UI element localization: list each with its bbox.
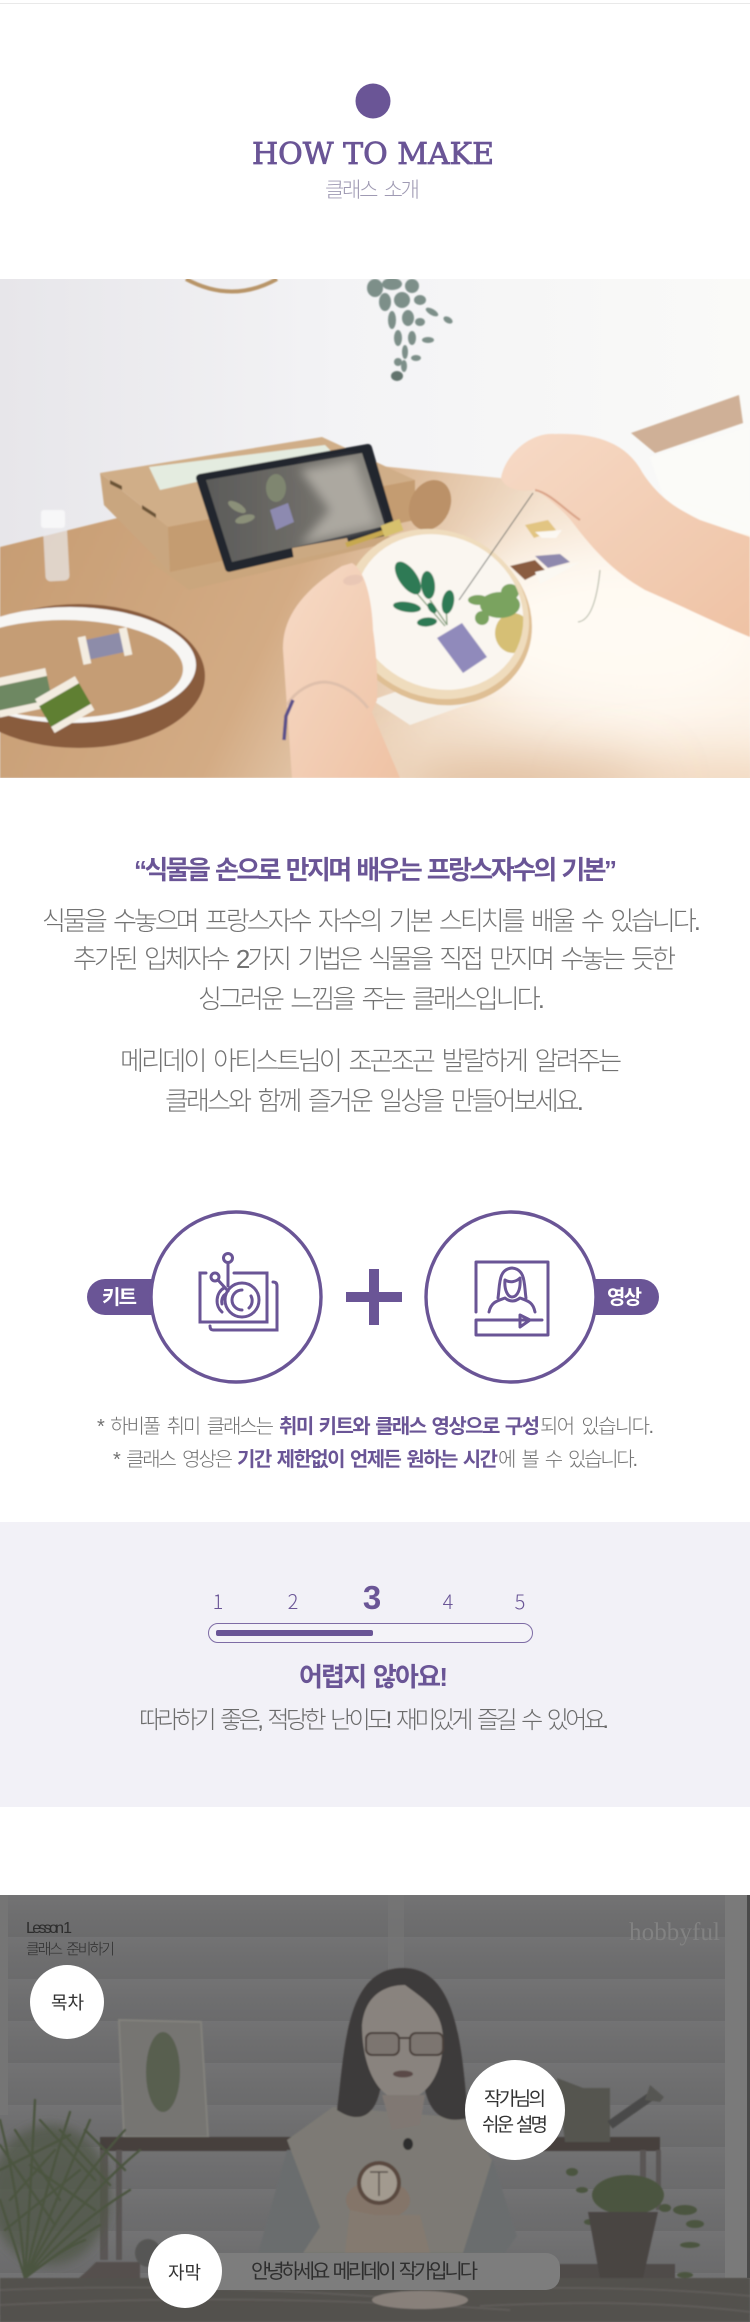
- embroidery hoop: [376, 579, 533, 706]
- scale numbers: 5: [515, 1586, 525, 1615]
- embroidered plant: [390, 557, 531, 673]
- shadow of the hoop on table: [410, 480, 452, 530]
- hobbyful logo: hobbyful: [629, 1919, 720, 1946]
- pill label: video: [570, 1279, 659, 1315]
- left hand: [283, 563, 400, 778]
- stones: [135, 2239, 161, 2267]
- shelf: [100, 2137, 660, 2151]
- lesson label: [26, 1922, 113, 1956]
- hanging plant: [367, 278, 454, 381]
- photo: class video screenshot: [0, 1895, 750, 2322]
- section header: [252, 84, 494, 202]
- callout: artist explanation: 쉬운 설명: [482, 2114, 548, 2136]
- scale numbers: 1: [213, 1586, 223, 1615]
- microphone: [403, 2138, 413, 2150]
- pill label: kit: [87, 1279, 177, 1315]
- tablet phone: [200, 448, 392, 568]
- lesson label: Lesson 1: [26, 1920, 72, 1937]
- difficulty description: 따라하기 좋은, 적당한 난이도! 재미있게 즐길 수 있어요.: [139, 1707, 609, 1734]
- intro paragraph: 싱그러운 느낌을 주는 클래스입니다.: [198, 984, 545, 1014]
- notes: 취미 키트와 클래스 영상으로 구성: [279, 1415, 540, 1438]
- header dot: [356, 84, 390, 118]
- table top: [0, 2278, 750, 2322]
- subtitle bar: [180, 2253, 560, 2290]
- subtitle: 클래스 소개: [325, 179, 420, 202]
- watering can: [557, 2078, 610, 2142]
- hands and small hoop: [346, 2186, 410, 2214]
- notes: 되어 있습니다.: [540, 1415, 654, 1438]
- face and neck: [362, 1985, 443, 2100]
- large brown hoop: [0, 604, 205, 748]
- circle: video: [426, 1212, 596, 1382]
- plus sign: [346, 1269, 402, 1325]
- scale numbers: 2: [288, 1586, 298, 1615]
- right ivy plant: [566, 2168, 704, 2278]
- scale numbers: 3: [363, 1579, 381, 1616]
- intro paragraph: 추가된 입체자수 2가지 기법은 식물을 직접 만지며 수놓는 듯한: [73, 944, 676, 974]
- lesson label: 클래스 준비하기: [26, 1941, 115, 1958]
- glasses: [366, 2033, 443, 2055]
- subtitle bar: 안녕하세요 메리데이 작가입니다: [251, 2260, 478, 2283]
- intro paragraph: 식물을 수놓으며 프랑스자수 자수의 기본 스티치를 배울 수 있습니다.: [42, 906, 701, 936]
- title: HOW TO MAKE: [252, 137, 494, 172]
- intro paragraph: 메리데이 아티스트님이 조곤조곤 발랄하게 알려주는: [120, 1046, 622, 1076]
- kit and video diagram: [87, 1212, 659, 1382]
- icon: embroidery kit: [200, 1254, 277, 1330]
- thread bottle: [42, 530, 70, 582]
- callout: table of contents: [30, 1965, 104, 2039]
- frame with leaf: [119, 2020, 208, 2137]
- sleeves: [264, 2149, 316, 2234]
- woman: [258, 1968, 517, 2253]
- wall hoop: [186, 279, 277, 292]
- callout: subtitles: 자막: [168, 2263, 201, 2283]
- small bobbins on table: [525, 520, 556, 538]
- panel: difficulty: [0, 1522, 750, 1807]
- thread bobbins: [78, 627, 132, 665]
- stand tab: [292, 538, 350, 560]
- mouth: [393, 2070, 413, 2078]
- notes: 기간 제한없이 언제든 원하는 시간: [237, 1448, 498, 1471]
- hoop screw: [345, 530, 384, 548]
- cardboard box: [286, 536, 390, 564]
- notes: * 하비풀 취미 클래스는: [97, 1415, 274, 1438]
- pill label: kit: 키트: [102, 1286, 137, 1309]
- scale numbers: [213, 1579, 525, 1616]
- top divider line: [0, 3, 750, 4]
- shirt: [287, 2107, 492, 2253]
- bench: [631, 395, 743, 453]
- circle: kit: [151, 1212, 321, 1382]
- photo: hands embroidering a plant hoop: [0, 278, 750, 812]
- left palm plant: [0, 2125, 110, 2265]
- intro paragraph: [42, 906, 701, 1116]
- notes: 에 볼 수 있습니다.: [498, 1448, 638, 1471]
- callout: table of contents: 목차: [51, 1993, 84, 2013]
- table: [0, 460, 750, 778]
- bracelet: [287, 682, 368, 708]
- scale numbers: 4: [443, 1586, 454, 1615]
- hair: [337, 1968, 468, 2120]
- right hand: [501, 434, 750, 637]
- quote heading: “식물을 손으로 만지며 배우는 프랑스자수의 기본”: [134, 855, 617, 885]
- pill label: video: 영상: [607, 1286, 642, 1309]
- difficulty heading: 어렵지 않아요!: [299, 1662, 448, 1692]
- difficulty bar: [208, 1624, 532, 1642]
- thread: [459, 493, 533, 600]
- icon: video lesson: [476, 1262, 548, 1335]
- notes: * 클래스 영상은: [113, 1448, 233, 1471]
- callout: artist explanation: 작가님의: [484, 2088, 546, 2110]
- cloth under hoop: [376, 692, 470, 726]
- notes: [97, 1415, 654, 1471]
- flower pot: [588, 2212, 658, 2265]
- callout: subtitles: [148, 2234, 222, 2308]
- intro paragraph: 클래스와 함께 즐거운 일상을 만들어보세요.: [165, 1086, 584, 1116]
- callout: artist explanation: [465, 2060, 565, 2160]
